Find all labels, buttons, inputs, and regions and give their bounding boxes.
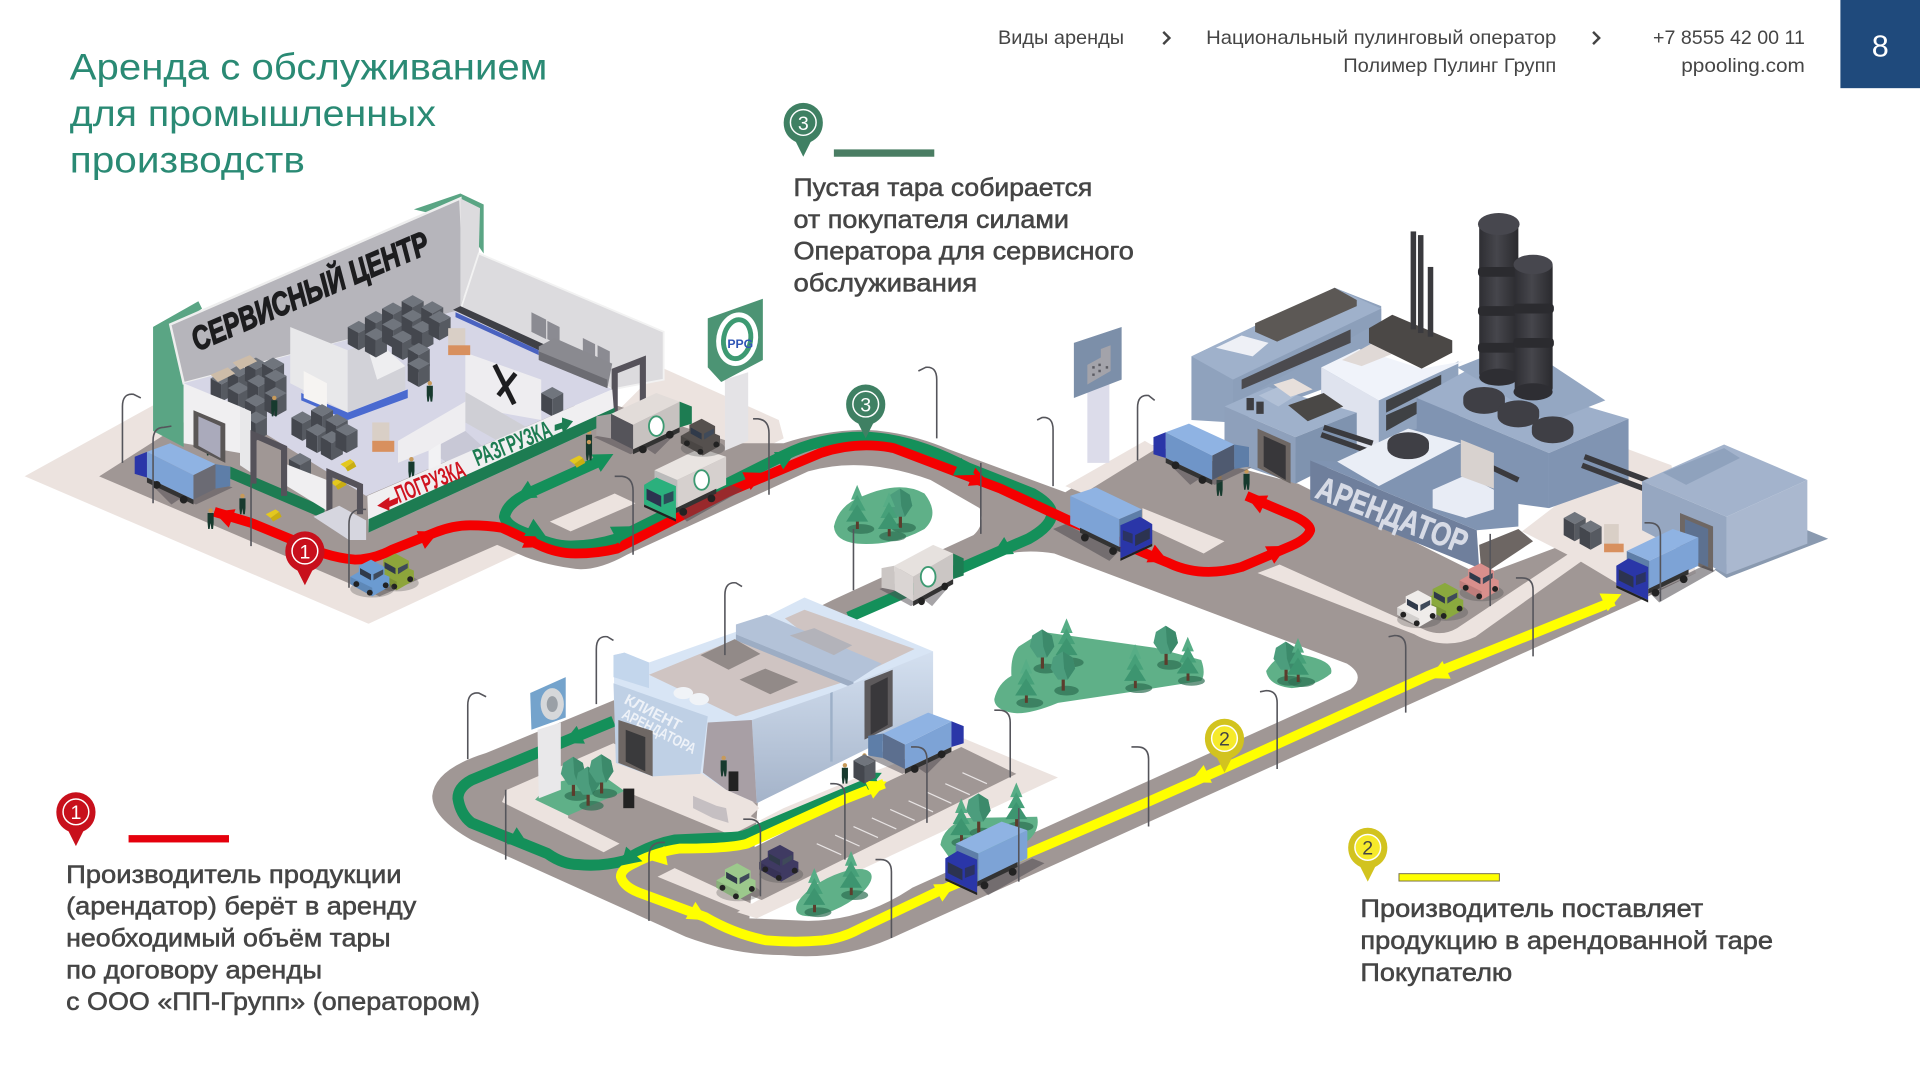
map pin 1: 1: [299, 541, 310, 563]
park: tree island: [834, 485, 932, 544]
client plot: [502, 729, 1058, 918]
truck: service unloading: [594, 393, 692, 454]
front block with АРЕНДАТОР: [1310, 429, 1518, 568]
middle white block: [1321, 315, 1463, 471]
truck: white on upper road: [879, 545, 964, 606]
park: large green: [994, 618, 1205, 713]
chimney tall: [1478, 213, 1520, 386]
route: yellow: [621, 601, 1614, 942]
legend 2: delivery: Покупателю: [1360, 959, 1512, 987]
legend 2: delivery: [1348, 828, 1773, 987]
central white area: [749, 552, 1358, 921]
service centre building: [153, 193, 664, 540]
legend 1: lease: по договору аренды: [66, 956, 322, 984]
client lawn trees: [561, 754, 617, 811]
right wall: [752, 651, 933, 803]
header breadcrumbs: Национальный пулинговый оператор: [1206, 28, 1556, 49]
park: by lower truck: [940, 782, 1038, 859]
client sign: [530, 677, 566, 798]
legend 1: lease: необходимый объём тары: [66, 925, 391, 953]
left front wall and doors: [184, 360, 643, 519]
title: Аренда с обслуживанием: [70, 47, 547, 88]
legend 2: delivery: продукцию в арендованной таре: [1360, 927, 1773, 955]
left wall with sign: КЛИЕНТ: [621, 691, 685, 735]
truck: right side of curve: [1053, 487, 1152, 561]
legend 3: empty containers: Пустая тара собирается: [793, 174, 1092, 202]
map pin 2: 2: [1219, 729, 1230, 751]
conveyor and machine line: [453, 306, 612, 388]
park: parking lawn: [790, 851, 878, 926]
icon: tools: [495, 365, 516, 404]
stairs: [313, 506, 366, 540]
forklifts and workers: [206, 328, 592, 529]
roof tanks: [1463, 387, 1573, 443]
truck: annex dock: [1616, 529, 1716, 602]
front wall with ПОГРУЗКА РАЗГРУЗКА: РАЗГРУЗКА: [470, 416, 556, 472]
factory: [1191, 213, 1649, 576]
left lower block with door: [1224, 378, 1357, 484]
route arrows: red: [210, 464, 1291, 571]
pallets: [211, 295, 563, 482]
route arrows: yellow: [645, 585, 1626, 929]
legend 1: lease: (арендатор) берёт в аренду: [66, 893, 417, 921]
page number: 8: [1872, 29, 1889, 63]
front wall with ПОГРУЗКА РАЗГРУЗКА: [367, 389, 615, 533]
route: green: [458, 437, 1052, 865]
legend 3: empty containers: [784, 103, 1134, 297]
route arrows: green: [507, 443, 1014, 871]
park: right small: [1266, 638, 1331, 688]
truck logos: [649, 416, 936, 587]
floor: [184, 310, 612, 496]
truck: green cab on road: [644, 448, 743, 522]
PPG sign: [708, 299, 763, 451]
truck: service dock: [135, 443, 233, 504]
service centre plot: [23, 367, 784, 624]
title: для промышленных: [70, 93, 436, 134]
street lamps: [122, 367, 1660, 938]
thin pipes: [1411, 231, 1433, 337]
chimney short: [1513, 255, 1554, 400]
left wall with sign: [613, 683, 708, 776]
header breadcrumbs: [998, 28, 1805, 77]
page number: [1840, 0, 1920, 88]
map pin 1: [285, 531, 324, 585]
factory annex: [1642, 444, 1828, 578]
legend 3: empty containers: Оператора для сервисного: [793, 238, 1134, 266]
truck: lower road: [945, 822, 1044, 895]
factory yard equipment: [1217, 469, 1624, 552]
parking stripes: [817, 773, 987, 855]
legend 1: lease: с ООО «ПП-Групп» (оператором): [66, 988, 480, 1016]
right block: [1417, 343, 1629, 508]
road network: [99, 404, 1696, 956]
left block: [1191, 288, 1381, 422]
route: red: [214, 445, 1310, 572]
header breadcrumbs: Полимер Пулинг Групп: [1343, 56, 1556, 77]
PPG sign: PPG: [727, 337, 753, 351]
sidewalks: [550, 441, 1696, 644]
title: [70, 47, 547, 181]
map pin 3: [846, 384, 885, 438]
legend 3: empty containers: обслуживания: [793, 269, 977, 297]
back wall with sign: СЕРВИСНЫЙ ЦЕНТР: [185, 223, 435, 359]
factory sign: [1074, 327, 1122, 463]
left wall with sign: АРЕНДАТОРА: [619, 706, 699, 758]
legend 2: delivery: 2: [1362, 838, 1373, 860]
legend 2: delivery: Производитель поставляет: [1360, 895, 1704, 923]
truck: factory dock: [1153, 424, 1251, 485]
front wall with ПОГРУЗКА РАЗГРУЗКА: ПОГРУЗКА: [391, 456, 470, 509]
legend 1: lease: Производитель продукции: [66, 861, 402, 889]
trucks: [135, 393, 1716, 895]
cars: [350, 419, 1504, 901]
legend 3: empty containers: 3: [798, 113, 809, 135]
legend 1: lease: [56, 792, 480, 1016]
partition walls: [290, 327, 541, 492]
right wall with windows: [460, 253, 664, 389]
header breadcrumbs: +7 8555 42 00 11: [1653, 28, 1805, 49]
header breadcrumbs: Виды аренды: [998, 28, 1124, 49]
legend 1: lease: 1: [70, 802, 81, 824]
client building: [613, 598, 933, 823]
front block with АРЕНДАТОР: АРЕНДАТОР: [1311, 470, 1473, 562]
truck: client dock: [866, 713, 964, 774]
header breadcrumbs: ppooling.com: [1681, 56, 1805, 77]
legend 3: empty containers: от покупателя силами: [793, 206, 1069, 234]
connecting pipes: [1321, 427, 1649, 490]
map pin 3: 3: [860, 394, 871, 416]
title: производств: [70, 140, 305, 181]
map pin 2: [1205, 719, 1244, 773]
